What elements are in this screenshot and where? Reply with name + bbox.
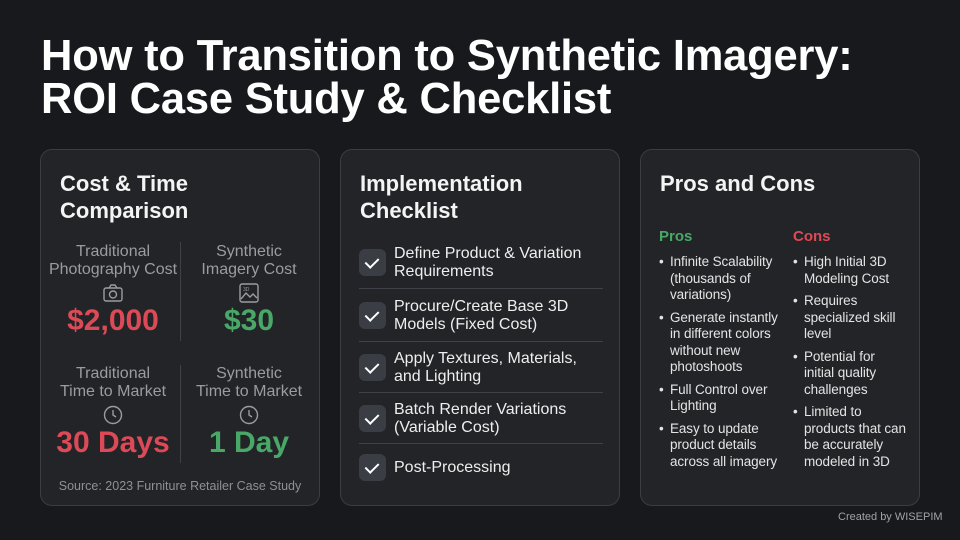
cons column: specialized skill	[804, 310, 895, 324]
pros column	[659, 228, 778, 469]
pros column: in different colors	[670, 326, 771, 341]
credit: Created by WISEPIM	[838, 511, 943, 523]
heading: pros and cons: Pros and Cons	[660, 171, 815, 196]
panel: pros and cons	[640, 149, 920, 506]
stat: synthetic cost: $30	[224, 304, 274, 337]
item 2: Procure/Create Base 3D	[394, 298, 568, 315]
item 3: Apply Textures, Materials,	[394, 350, 577, 367]
pros column: Pros	[659, 228, 692, 245]
item 5	[359, 454, 510, 481]
stat: synthetic cost: Synthetic	[216, 243, 282, 260]
cons column: Cons	[793, 228, 830, 245]
item 1: Define Product & Variation	[394, 245, 581, 262]
pros column: Infinite Scalability	[670, 254, 772, 269]
stat: traditional cost	[49, 243, 177, 337]
title: ROI Case Study & Checklist	[41, 75, 611, 123]
item 2	[359, 298, 568, 333]
cons column: level	[804, 326, 831, 341]
stat: traditional time	[56, 365, 170, 459]
pros column: Generate instantly	[670, 310, 778, 324]
item 2: Models (Fixed Cost)	[394, 316, 537, 333]
cons column: High Initial 3D	[804, 254, 887, 269]
panel: cost & time comparison	[40, 149, 320, 506]
item 4: (Variable Cost)	[394, 419, 500, 436]
pros column: photoshoots	[670, 359, 742, 374]
item 3: and Lighting	[394, 368, 481, 385]
panel: implementation checklist	[340, 149, 620, 506]
heading: cost & time	[60, 171, 188, 223]
stat: synthetic time: 1 Day	[209, 426, 289, 459]
pros column: across all imagery	[670, 454, 777, 468]
stat: synthetic time	[196, 365, 302, 459]
cons column: products that can	[804, 420, 906, 436]
stat: traditional time: Time to Market	[60, 383, 166, 400]
pros column: without new	[670, 342, 740, 358]
item 4: Batch Render Variations	[394, 401, 566, 418]
title	[41, 32, 853, 123]
cons column: initial quality	[804, 365, 876, 380]
cons column: Requires	[804, 293, 857, 308]
pros column: variations)	[670, 287, 731, 302]
item 1: Requirements	[394, 263, 494, 280]
item 3	[359, 350, 577, 385]
stat: traditional cost: Traditional	[76, 243, 150, 260]
item 1	[359, 245, 581, 280]
title: How to Transition to Synthetic Imagery:	[41, 32, 853, 80]
cons column: challenges	[804, 382, 868, 396]
heading: cost & time: Cost & Time	[60, 171, 188, 196]
heading: checklist: Implementation	[360, 171, 523, 196]
stat: synthetic cost	[201, 243, 297, 337]
item 4	[359, 401, 566, 436]
pros column: Easy to update	[670, 420, 759, 436]
stat: traditional cost: Photography Cost	[49, 261, 177, 278]
pros column: (thousands of	[670, 270, 751, 286]
cons column: modeled in 3D	[804, 454, 890, 468]
stat: traditional time: 30 Days	[56, 426, 170, 459]
cons column: be accurately	[804, 437, 883, 452]
heading: checklist	[360, 171, 523, 223]
cons column: Potential for	[804, 348, 875, 364]
heading: checklist: Checklist	[360, 198, 458, 223]
heading: cost & time: Comparison	[60, 198, 188, 223]
stat: synthetic cost: Imagery Cost	[201, 261, 297, 278]
pros column: Full Control over	[670, 382, 767, 396]
item 5: Post-Processing	[394, 459, 510, 476]
pros column: Lighting	[670, 398, 716, 413]
stat: synthetic time: Time to Market	[196, 383, 302, 400]
stat: traditional time: Traditional	[76, 365, 150, 382]
cons column: Limited to	[804, 404, 862, 419]
cons column	[793, 228, 906, 468]
pros column: product details	[670, 437, 756, 452]
stat: synthetic cost: 3D	[243, 287, 250, 293]
stat: traditional cost: $2,000	[67, 304, 159, 337]
stat: synthetic time: Synthetic	[216, 365, 282, 382]
cons column: Modeling Cost	[804, 270, 889, 286]
source note: Source: 2023 Furniture Retailer Case Study	[59, 479, 301, 493]
